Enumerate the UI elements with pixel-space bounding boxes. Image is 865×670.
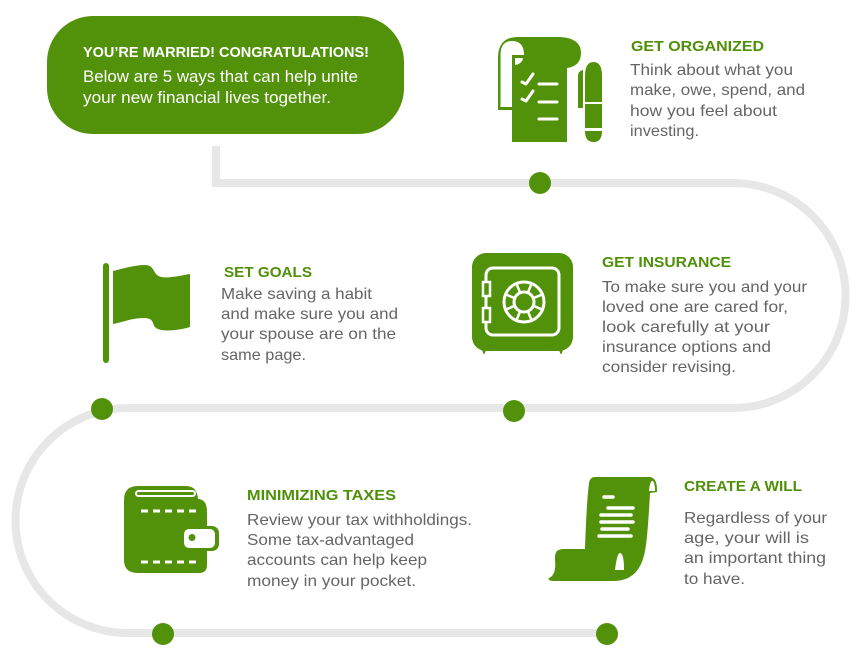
step: get organized: Think about what you bbox=[630, 62, 793, 79]
icon: checklist and pen bbox=[498, 37, 602, 142]
step: get insurance: look carefully at your bbox=[602, 319, 771, 336]
step: create a will bbox=[684, 478, 828, 588]
step: get organized: make, owe, spend, and bbox=[630, 82, 805, 99]
step: minimizing taxes: money in your pocket. bbox=[247, 573, 416, 590]
step: create a will: to have. bbox=[684, 571, 745, 588]
icon: will scroll bbox=[549, 477, 657, 581]
step: minimizing taxes: Review your tax withholdings. bbox=[247, 512, 472, 529]
path markers bbox=[91, 172, 618, 645]
step: set goals: your spouse are on the bbox=[221, 326, 396, 343]
step: get insurance: To make sure you and your bbox=[602, 279, 808, 296]
step: minimizing taxes: Some tax-advantaged bbox=[247, 532, 414, 549]
step: create a will: an important thing bbox=[684, 550, 826, 567]
step: create a will: Regardless of your bbox=[684, 510, 828, 527]
step: set goals: and make sure you and bbox=[221, 306, 398, 323]
step: set goals: same page. bbox=[221, 347, 306, 364]
step: minimizing taxes: accounts can help keep bbox=[247, 552, 427, 569]
step: get insurance: loved one are cared for, bbox=[602, 299, 788, 316]
step: get insurance bbox=[602, 254, 808, 376]
step: get organized: GET ORGANIZED bbox=[631, 38, 764, 55]
intro banner bbox=[47, 16, 404, 134]
intro banner: your new financial lives together. bbox=[83, 88, 331, 107]
step: get organized: how you feel about bbox=[630, 103, 778, 120]
step: minimizing taxes bbox=[247, 487, 472, 590]
step: set goals: SET GOALS bbox=[224, 264, 312, 281]
step: get organized bbox=[630, 38, 805, 140]
step: get insurance: insurance options and bbox=[602, 339, 771, 356]
intro banner: YOU’RE MARRIED! CONGRATULATIONS! bbox=[83, 44, 369, 61]
step: get organized: investing. bbox=[630, 123, 699, 140]
step: get insurance: consider revising. bbox=[602, 359, 736, 376]
step: set goals: Make saving a habit bbox=[221, 286, 373, 303]
icon: wallet bbox=[124, 486, 219, 573]
step: create a will: age, your will is bbox=[684, 530, 809, 547]
step: get insurance: GET INSURANCE bbox=[602, 254, 731, 271]
icon: flag bbox=[103, 263, 190, 363]
step: minimizing taxes: MINIMIZING TAXES bbox=[247, 487, 396, 504]
step: set goals bbox=[221, 264, 398, 364]
winding path connector bbox=[16, 146, 846, 633]
intro banner: Below are 5 ways that can help unite bbox=[83, 67, 358, 86]
icon: safe bbox=[472, 253, 573, 354]
step: create a will: CREATE A WILL bbox=[684, 478, 802, 495]
